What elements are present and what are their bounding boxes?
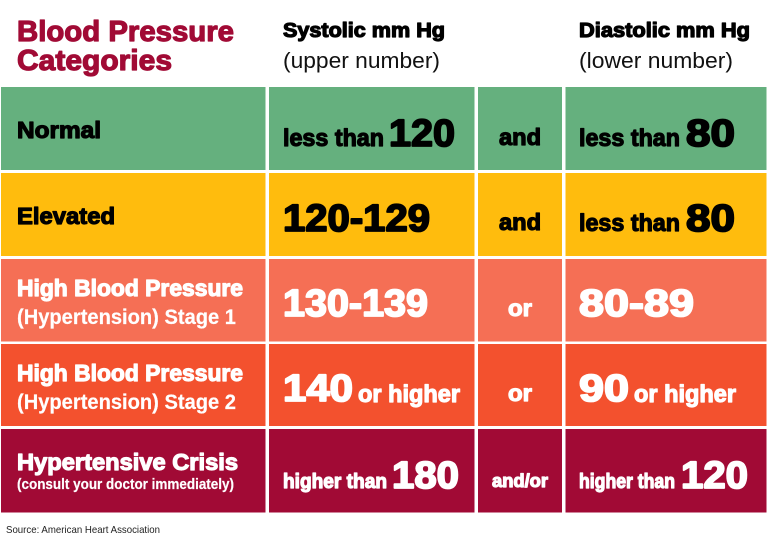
row: high blood pressure stage 2: 140 <box>283 368 353 410</box>
title: Blood Pressure <box>17 16 234 48</box>
heading: systolic column: (upper number) <box>283 48 440 73</box>
row: high blood pressure stage 2: or <box>508 380 532 406</box>
row: high blood pressure stage 2: (Hypertension) Stage 2 <box>17 391 236 414</box>
row: high blood pressure stage 1: or <box>508 295 532 321</box>
heading: systolic column <box>283 20 445 73</box>
row: high blood pressure stage 1 <box>1 259 766 342</box>
row: normal: 80 <box>686 113 735 155</box>
row: elevated: 120-129 <box>283 198 430 240</box>
row: hypertensive crisis: (consult your doctor immediately) <box>17 476 234 493</box>
heading: systolic column: Systolic mm Hg <box>283 20 445 42</box>
row: hypertensive crisis: higher than <box>579 471 675 493</box>
row: hypertensive crisis: and/or <box>492 471 548 491</box>
row: high blood pressure stage 1: (Hypertension) Stage 1 <box>17 306 236 329</box>
row: high blood pressure stage 2: or higher <box>358 381 460 408</box>
row: high blood pressure stage 1: High Blood Pressure <box>17 275 243 301</box>
row: elevated: and <box>499 209 541 235</box>
row: high blood pressure stage 1: 80-89 <box>579 283 694 325</box>
row: hypertensive crisis: 180 <box>392 455 459 497</box>
row: hypertensive crisis: 120 <box>681 455 748 497</box>
row: normal: less than <box>283 125 384 152</box>
row: hypertensive crisis <box>1 429 766 512</box>
row: high blood pressure stage 1: 130-139 <box>283 283 428 325</box>
row: elevated: less than <box>579 210 680 237</box>
row: high blood pressure stage 2: or higher <box>634 381 736 408</box>
row: normal: less than <box>579 125 680 152</box>
row: normal: and <box>499 124 541 150</box>
row: elevated: Elevated <box>17 203 115 229</box>
row: hypertensive crisis: higher than <box>283 471 387 493</box>
title <box>17 16 234 77</box>
heading: diastolic column: Diastolic mm Hg <box>579 20 750 42</box>
row: normal: Normal <box>17 117 101 143</box>
row: normal: 120 <box>389 113 455 155</box>
row: hypertensive crisis: Hypertensive Crisis <box>17 449 238 475</box>
row: high blood pressure stage 2 <box>1 344 766 426</box>
row: elevated: 80 <box>686 198 735 240</box>
row: normal <box>1 87 766 170</box>
heading: diastolic column <box>579 20 750 73</box>
row: high blood pressure stage 2: 90 <box>579 368 629 410</box>
row: elevated <box>1 173 766 256</box>
heading: diastolic column: (lower number) <box>579 48 733 73</box>
source note: Source: American Heart Association <box>6 524 160 536</box>
row: high blood pressure stage 2: High Blood Pressure <box>17 360 243 386</box>
title: Categories <box>17 45 172 77</box>
